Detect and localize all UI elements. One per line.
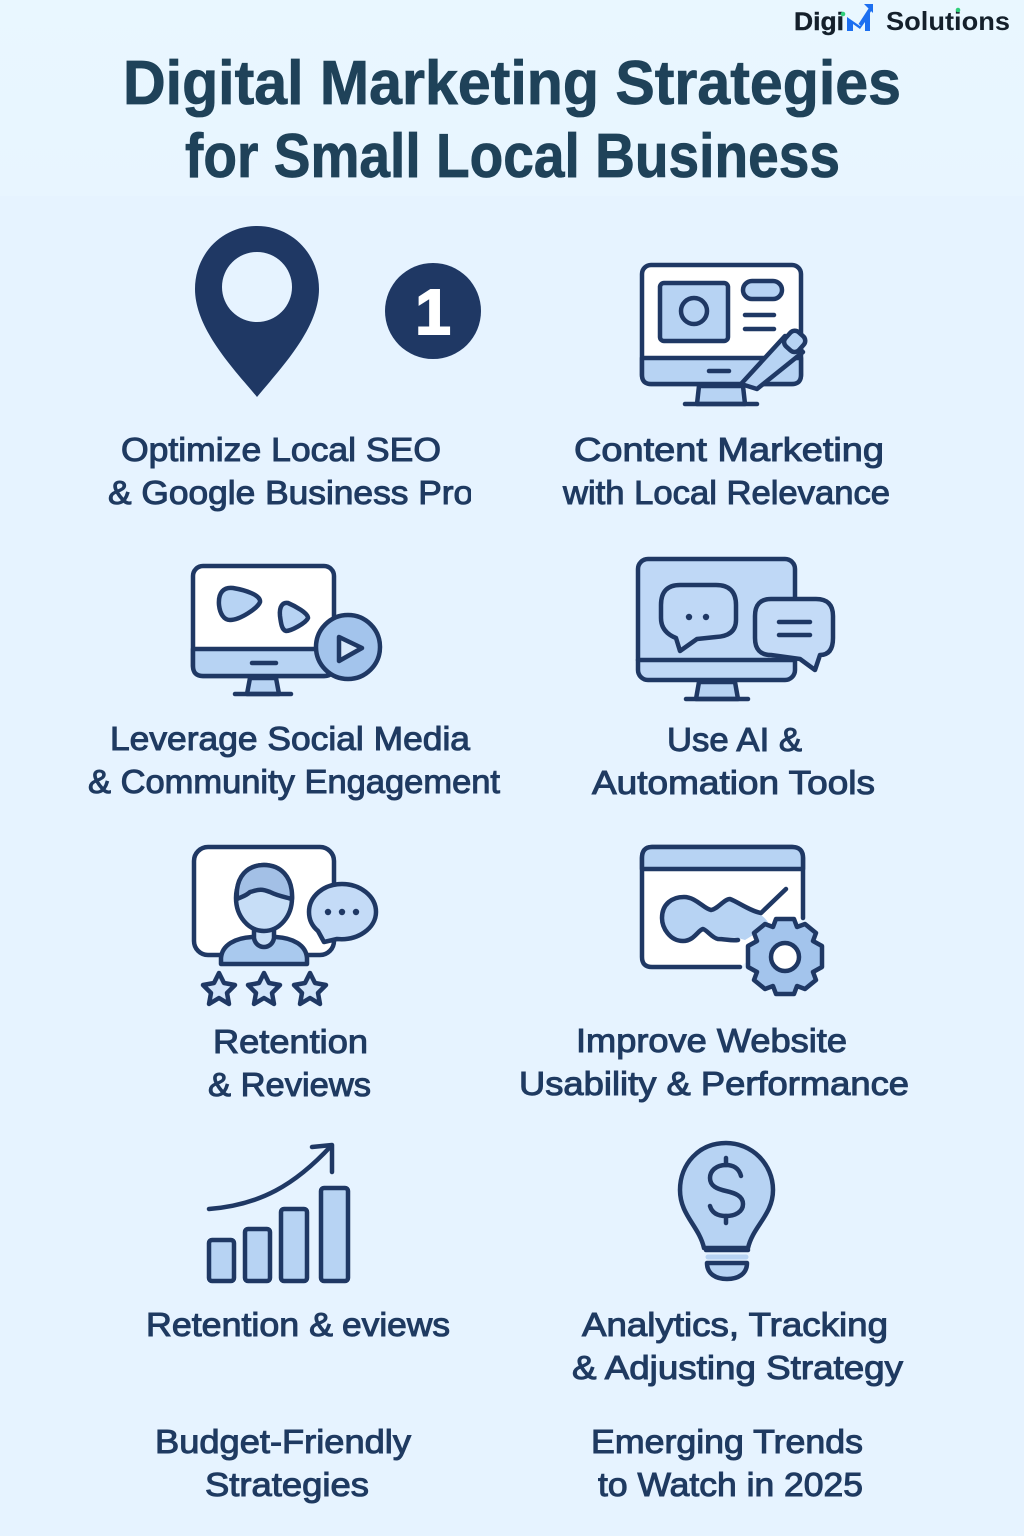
label: emerging trends	[591, 1423, 863, 1503]
icon: browser with curve and gear	[642, 847, 822, 994]
label: analytics: & Adjusting Strategy	[572, 1349, 904, 1386]
label: website usability: Improve Website	[576, 1022, 847, 1059]
label: analytics: Analytics, Tracking	[582, 1306, 888, 1343]
label: retention and reviews second: Retention &	[146, 1306, 333, 1343]
label: retention and reviews: & Reviews	[208, 1066, 371, 1103]
label: social media: & Community Engagement	[88, 763, 500, 800]
label: analytics	[572, 1306, 904, 1386]
icon: number badge 1	[385, 263, 481, 359]
label: AI and automation	[592, 721, 875, 801]
label: retention and reviews second: eviews	[342, 1306, 450, 1343]
label: retention and reviews	[208, 1023, 371, 1103]
icon: customer, review bubble and stars	[194, 847, 376, 1004]
label: budget-friendly	[155, 1423, 412, 1503]
label: AI and automation: Automation Tools	[592, 764, 875, 801]
label: content marketing: with Local Relevance	[562, 474, 890, 511]
label: website usability	[519, 1022, 909, 1102]
label: social media	[88, 720, 500, 800]
icon: rising bar chart with arrow	[209, 1145, 348, 1281]
label: optimize local SEO	[108, 431, 484, 511]
logo: DigiM Solutions: Digi	[794, 8, 844, 36]
label: optimize local SEO: & Google Business Prof	[108, 474, 484, 511]
title: for Small Local Business	[185, 122, 840, 191]
label: AI and automation: Use AI &	[667, 721, 802, 758]
label: optimize local SEO: Optimize Local SEO	[121, 431, 441, 468]
title: Digital Marketing Strategies	[123, 49, 901, 118]
label: website usability: Usability & Performance	[519, 1065, 909, 1102]
icon: content monitor with pencil	[642, 265, 808, 404]
logo: DigiM Solutions	[794, 4, 1010, 36]
label: emerging trends: to Watch in 2025	[598, 1466, 863, 1503]
label: social media: Leverage Social Media	[110, 720, 471, 757]
logo: DigiM Solutions: Solutions	[886, 6, 1010, 36]
title	[123, 49, 901, 191]
icon: location pin	[195, 226, 319, 397]
icon: light bulb with dollar sign	[680, 1143, 773, 1279]
icon: video monitor with play button	[193, 566, 380, 694]
label: content marketing: Content Marketing	[574, 431, 884, 468]
label: budget-friendly: Budget-Friendly	[155, 1423, 412, 1460]
label: retention and reviews: Retention	[213, 1023, 368, 1060]
icon: monitor with chat bubbles	[638, 559, 833, 699]
label: content marketing	[562, 431, 890, 511]
label: budget-friendly: Strategies	[205, 1466, 369, 1503]
icon: number badge 1: 1	[415, 276, 451, 348]
label: retention and reviews second	[146, 1306, 450, 1343]
label: emerging trends: Emerging Trends	[591, 1423, 863, 1460]
